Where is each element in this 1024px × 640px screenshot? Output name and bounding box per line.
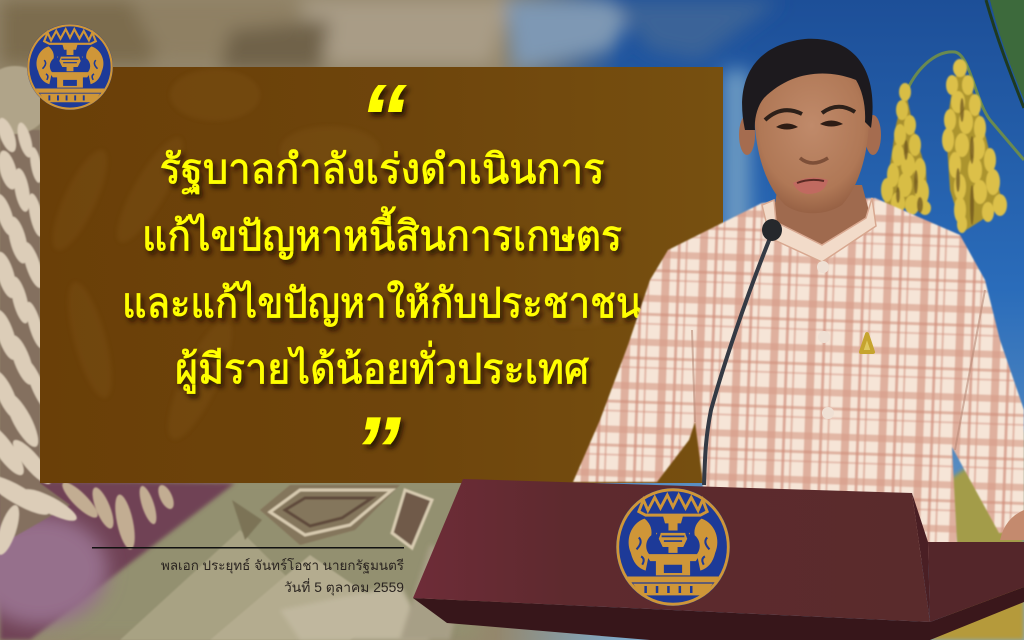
- quote text: และแก้ไขปัญหาให้กับประชาชน: [122, 280, 642, 326]
- quote text: แก้ไขปัญหาหนี้สินการเกษตร: [142, 206, 622, 259]
- quote text: รัฐบาลกำลังเร่งดำเนินการ: [160, 146, 604, 194]
- speaker: shirt: [573, 198, 1024, 560]
- quote mark opening: “: [359, 65, 407, 172]
- background: banknote pattern: [120, 485, 470, 640]
- speaker: head: [739, 39, 881, 213]
- speaker: eyebrows: [765, 107, 855, 120]
- quote text: ผู้มีรายได้น้อยทั่วประเทศ: [175, 341, 589, 394]
- attribution rule and caption: วันที่ 5 ตุลาคม 2559: [284, 578, 404, 596]
- attribution rule and caption: [92, 547, 404, 596]
- left national seal: [27, 24, 113, 110]
- speaker: nose: [800, 158, 828, 163]
- speaker: hand: [1000, 510, 1024, 540]
- speaker: collar: [762, 198, 876, 262]
- panel: quote background: [40, 67, 723, 483]
- speaker: buttons and pin badge: [817, 261, 873, 419]
- podium: [413, 479, 1024, 640]
- quote text: [122, 146, 642, 394]
- right panicle: [942, 59, 1007, 233]
- rice stalks: [881, 0, 1024, 640]
- speaker: sleeve shading: [692, 290, 985, 450]
- speaker: neck: [772, 185, 872, 250]
- quote mark closing: ”: [353, 397, 401, 504]
- left panicle: [881, 83, 931, 215]
- rice grains at left edge: [0, 66, 177, 557]
- speaker: mouth: [793, 178, 828, 194]
- speaker: hair: [742, 39, 873, 130]
- attribution rule and caption: พลเอก ประยุทธ์ จันทร์โอชา นายกรัฐมนตรี: [161, 557, 404, 574]
- podium seal: [616, 488, 730, 606]
- microphone: [704, 219, 782, 485]
- speaker: eyes: [776, 120, 843, 130]
